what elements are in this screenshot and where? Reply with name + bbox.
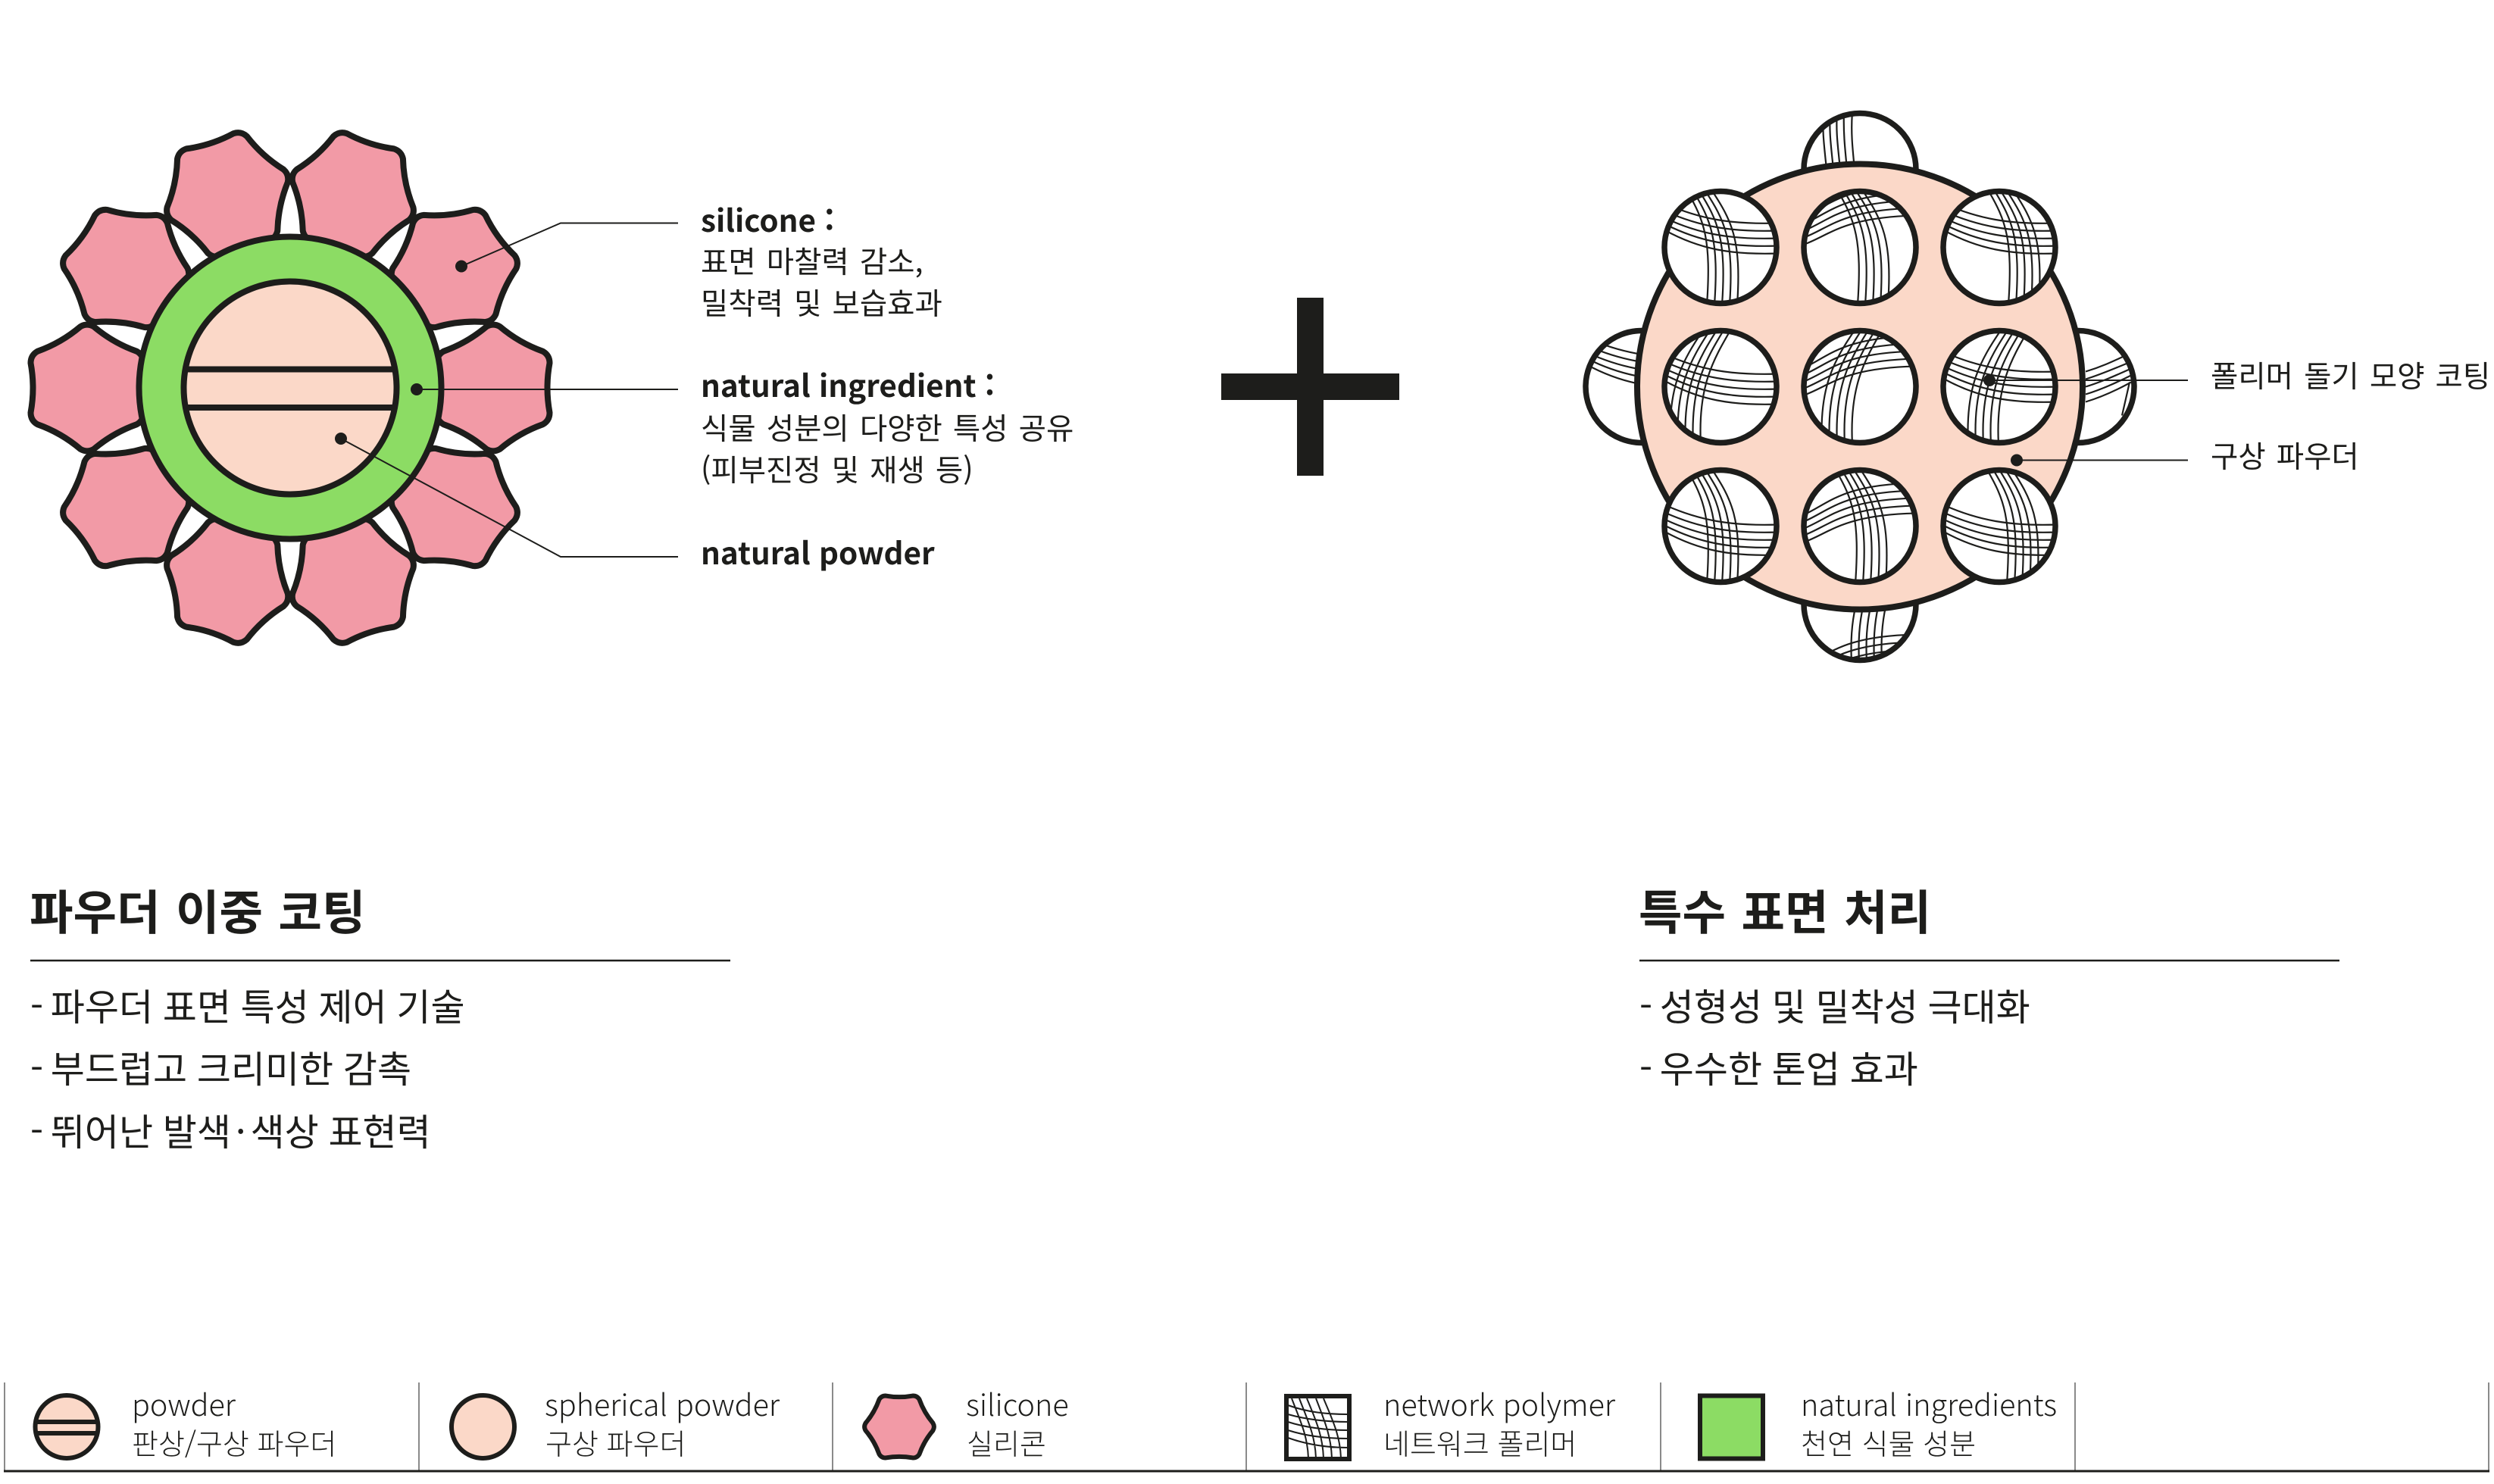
legend item: natural ingredients: 천연 식물 성분 <box>1801 1421 1976 1463</box>
outer polymer bumps <box>1584 112 2134 694</box>
legend item: network polymer: network polymer <box>1383 1382 1616 1425</box>
diagram: special surface treated spherical powder <box>1584 112 2134 694</box>
heading: 특수 표면 처리 <box>1639 874 1931 943</box>
label: natural ingredient: natural ingredient : <box>701 361 995 406</box>
silicone petals <box>30 121 550 655</box>
bullet list: - 우수한 톤업 효과 <box>1639 1040 1918 1094</box>
bullet list: - 부드럽고 크리미한 감촉 <box>30 1040 411 1094</box>
label: silicone <box>701 196 942 323</box>
label: spherical powder: 구상 파우더 <box>2211 433 2359 476</box>
legend item: spherical powder <box>452 1382 780 1463</box>
label: silicone: silicone : <box>701 196 834 241</box>
legend item: natural ingredients <box>1700 1382 2057 1463</box>
legend item: network polymer: 네트워크 폴리머 <box>1383 1421 1577 1463</box>
bullet list <box>30 978 465 1157</box>
bullet list: - 뛰어난 발색·색상 표현력 <box>30 1103 431 1157</box>
network polymer spheres <box>1663 185 2057 583</box>
legend item: powder: powder <box>132 1382 236 1425</box>
legend item: network polymer <box>1286 1382 1616 1463</box>
legend item: silicone: silicone <box>966 1382 1069 1425</box>
label: silicone: 표면 마찰력 감소, <box>701 239 924 282</box>
natural powder core <box>183 282 397 494</box>
heading: 파우더 이중 코팅 <box>30 874 365 943</box>
legend item: powder: 판상/구상 파우더 <box>132 1421 336 1463</box>
bullet list <box>1639 978 2030 1094</box>
label: natural ingredient: (피부진정 및 재생 등) <box>701 447 974 490</box>
panel: special surface treatment <box>1639 874 2339 1094</box>
natural ingredient ring <box>139 236 441 539</box>
plus sign <box>1221 298 1399 476</box>
panel: powder double coating <box>30 874 730 1157</box>
legend item: silicone <box>864 1382 1069 1463</box>
label: polymer bump coating: 폴리머 돌기 모양 코팅 <box>2211 353 2490 396</box>
diagram: powder double coating particle <box>30 121 550 655</box>
legend <box>4 1382 2489 1471</box>
label: natural powder: natural powder <box>701 529 935 573</box>
label: natural ingredient <box>701 361 1074 490</box>
bullet list: - 파우더 표면 특성 제어 기술 <box>30 978 465 1032</box>
legend item: natural ingredients: natural ingredients <box>1801 1382 2057 1425</box>
callout leaders: left diagram <box>335 223 678 557</box>
label: natural ingredient: 식물 성분의 다양한 특성 공유 <box>701 405 1074 448</box>
legend item: spherical powder: spherical powder <box>545 1382 780 1425</box>
spherical powder body <box>1637 164 2083 609</box>
legend item: silicone: 실리콘 <box>967 1421 1046 1463</box>
callout leaders: right diagram <box>1983 374 2188 467</box>
legend item: spherical powder: 구상 파우더 <box>545 1421 686 1463</box>
bullet list: - 성형성 및 밀착성 극대화 <box>1639 978 2030 1032</box>
label: silicone: 밀착력 및 보습효과 <box>701 280 942 323</box>
legend item: powder <box>35 1382 336 1463</box>
